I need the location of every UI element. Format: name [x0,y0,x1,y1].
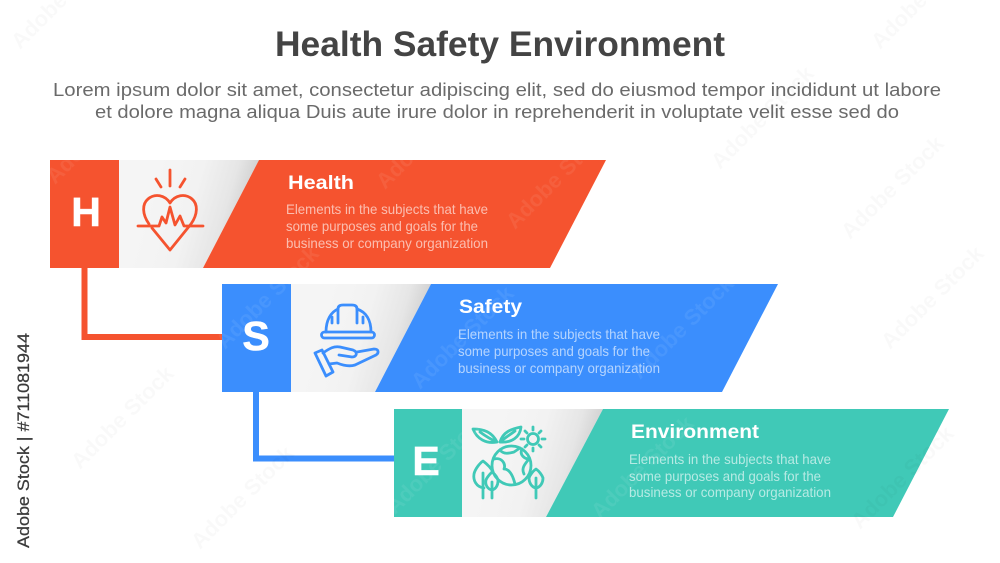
watermark text: Adobe Stock [846,420,959,534]
subtitle text: et dolore magna aliqua Duis aute irure dolor in reprehenderit in voluptate velit esse sed do [95,101,899,122]
description: health [286,201,488,251]
icon background: health [119,160,259,268]
letter tab: S: S [242,313,270,359]
connector: safety to environment [256,392,394,458]
description: environment: Elements in the subjects that have [629,451,831,467]
description: safety: business or company organization [458,360,660,376]
heading: health: Health [288,173,354,194]
banner: safety [375,284,778,392]
watermark text: Adobe Stock [66,360,179,474]
icon background: environment [462,409,603,517]
panel: environment [394,409,949,517]
connector: health to safety [84,268,222,337]
letter tab: E: E [412,438,440,484]
banner: health [203,160,606,268]
watermark text on panels: Adobe Stock [406,280,519,394]
icon: hard hat over hand [315,305,378,376]
description: health: Elements in the subjects that have [286,201,488,217]
description: health: business or company organization [286,235,488,251]
banner: environment [546,409,949,517]
subtitle text: Lorem ipsum dolor sit amet, consectetur adipiscing elit, sed do eiusmod tempor incididunt ut labore [53,79,941,100]
watermark text on panels: Adobe Stock [586,410,699,524]
heading: environment: Environment [631,422,760,443]
icon: globe, leaves, sun and trees [473,427,545,498]
heading: safety: Safety [459,297,522,318]
watermark text on panels [41,75,739,524]
watermark text on panels: Adobe Stock [41,75,154,189]
watermark text on panels: Adobe Stock [211,240,324,354]
watermark text on panels: Adobe Stock [626,270,739,384]
stock id side label: Adobe Stock | #711081944 [14,333,33,548]
description: environment: some purposes and goals for the [629,468,821,484]
watermark text on panels: Adobe Stock [371,80,484,194]
description: safety [458,326,660,376]
letter tab: E [394,409,462,517]
letter tab: H: H [71,189,101,235]
icon background: safety [291,284,431,392]
description: safety: some purposes and goals for the [458,343,650,359]
icon: heart with pulse [138,170,203,250]
description: safety: Elements in the subjects that have [458,326,660,342]
subtitle text [53,79,941,122]
letter tab: S [222,284,291,392]
panel: health [50,160,606,268]
watermark text: Adobe Stock [836,130,949,244]
watermark text: Adobe Stock [186,440,299,554]
watermark text: Adobe Stock [706,60,819,174]
watermark text on panels: Adobe Stock [381,405,494,519]
title: Health Safety Environment [275,25,725,64]
description: health: some purposes and goals for the [286,218,478,234]
description: environment: business or company organization [629,484,831,500]
watermark text on panels: Adobe Stock [501,120,614,234]
letter tab: H [50,160,119,268]
panel: safety [222,284,778,392]
description: environment [629,451,831,500]
watermark text: Adobe Stock [876,240,989,354]
